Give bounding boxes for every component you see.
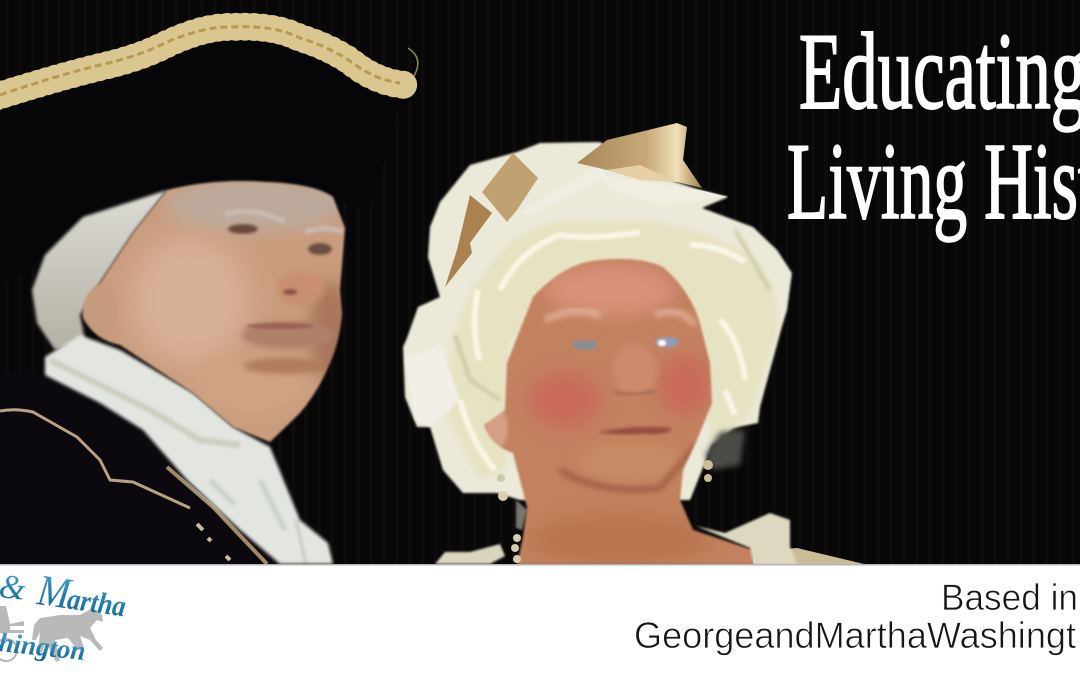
gold ribbon bow [445, 123, 702, 287]
white wig [32, 190, 167, 350]
tricorn hat [0, 12, 419, 110]
coat [0, 372, 280, 564]
title [787, 11, 1080, 242]
lace collar [435, 513, 797, 564]
figure: George Washington [0, 17, 418, 564]
dress [753, 548, 864, 564]
photo bottom rule [0, 564, 1080, 566]
cravat [45, 335, 333, 564]
grey hair strand [516, 500, 527, 530]
title: Educating [799, 11, 1080, 132]
text block: location and website: GeorgeandMarthaWashingt [634, 615, 1077, 656]
earrings and pearl necklace [497, 430, 745, 563]
logo wordmark [0, 565, 130, 666]
face and neck [483, 258, 754, 564]
bonnet and wig [403, 142, 792, 500]
logo wordmark: Martha [34, 565, 130, 626]
figure: Martha Washington [403, 123, 864, 570]
gold coat trim [0, 410, 267, 564]
logo: George and Martha Washington carriage [0, 565, 130, 666]
logo wordmark: hington [0, 627, 87, 666]
face [81, 179, 346, 444]
icon: grey horse and carriage [0, 606, 103, 662]
text block: location and website [634, 577, 1078, 656]
